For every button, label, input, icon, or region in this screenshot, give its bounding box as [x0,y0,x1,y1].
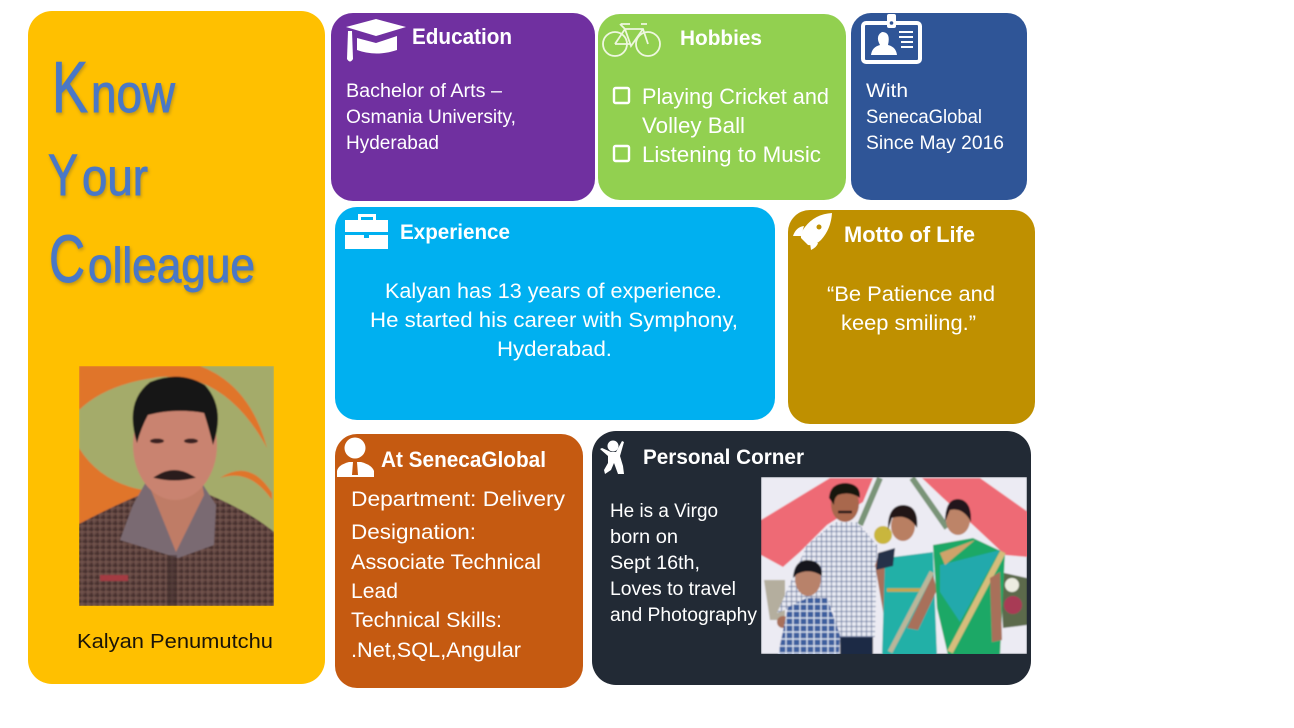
personal text [610,501,757,626]
motto quote: “Be Patience and [827,283,995,306]
title: know your colleague: K [52,48,88,128]
panel: know your colleague [28,11,325,684]
tenure text: SenecaGlobal [866,107,982,128]
experience text: Hyderabad. [497,338,612,361]
portrait photo [79,366,274,606]
checkbox: cricket and volley ball [614,88,629,103]
role details: Designation: [351,521,476,544]
tenure text: With [866,81,908,102]
title: know your colleague: now [91,64,176,124]
experience text: Kalyan has 13 years of experience. [385,280,722,303]
heading: personal corner: Personal Corner [643,446,804,469]
heading: hobbies: Hobbies [680,27,762,50]
icon: bicycle [603,24,660,56]
personal text: and Photography [610,605,757,626]
personal text: Sept 16th, [610,553,700,574]
hobbies list [614,84,829,167]
role details: Associate Technical [351,551,541,574]
panel: hobbies [598,14,846,200]
role details: .Net,SQL,Angular [351,639,521,662]
title: know your colleague: Y [48,143,78,208]
icon: person with tie [337,438,374,477]
personal text: born on [610,527,678,548]
education text: Hyderabad [346,133,439,154]
hobbies list: Volley Ball [642,113,745,138]
icon: id badge [863,14,920,62]
role details: Lead [351,580,398,603]
role details: Technical Skills: [351,609,502,632]
checkbox: music [614,146,629,161]
motto quote: keep smiling.” [841,312,976,335]
experience text [370,280,738,361]
tenure text [866,81,1004,154]
education text: Bachelor of Arts – [346,81,502,102]
icon: graduation cap [346,19,406,62]
panel: with senecaglobal [851,13,1027,200]
tenure text: Since May 2016 [866,133,1004,154]
personal text: He is a Virgo [610,501,718,522]
role details: Department: Delivery [351,488,566,511]
heading: motto of life: Motto of Life [844,222,975,247]
panel: personal corner [592,431,1031,685]
title: know your colleague [48,48,255,297]
personal text: Loves to travel [610,579,736,600]
title: know your colleague: olleague [88,239,255,293]
education text: Osmania University, [346,107,516,128]
panel: at senecaglobal [335,434,583,688]
name caption: Kalyan Penumutchu [77,631,273,653]
icon: briefcase [345,214,388,249]
icon: rocket [793,213,832,250]
panel: experience [335,207,775,420]
family photo [761,477,1028,655]
heading: at senecaglobal: At SenecaGlobal [381,447,546,472]
heading: experience: Experience [400,221,510,244]
role details [351,488,566,662]
motto quote [827,283,995,335]
experience text: He started his career with Symphony, [370,309,738,332]
title: know your colleague: C [49,222,85,297]
education text [346,81,516,154]
heading: education: Education [412,24,512,49]
title: know your colleague: our [82,149,148,207]
hobbies list: Listening to Music [642,142,821,167]
hobbies list: Playing Cricket and [642,84,829,109]
icon: dancing figure [600,440,624,474]
panel: motto of life [788,210,1035,424]
panel: education [331,13,595,201]
